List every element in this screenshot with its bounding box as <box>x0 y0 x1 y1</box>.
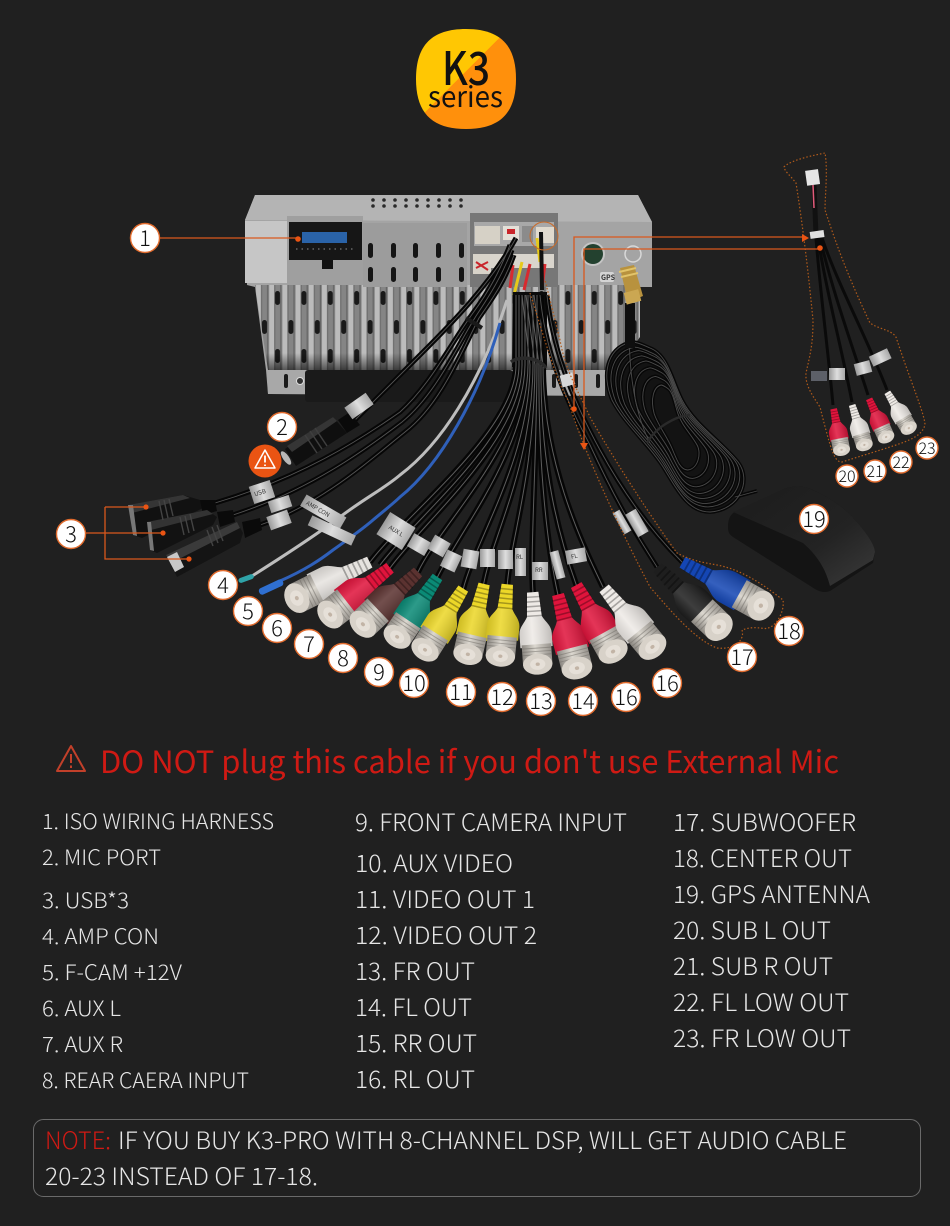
legend column 1: 1. ISO WIRING HARNESS <box>42 806 274 836</box>
legend column 3: 18. CENTER OUT <box>673 839 852 874</box>
number markers: 16 <box>614 680 638 712</box>
number markers: 3 <box>65 517 77 549</box>
number markers: 1 <box>139 221 151 253</box>
RCA connector 10 aux video <box>406 580 477 667</box>
legend column 1: 7. AUX R <box>42 1029 123 1059</box>
number markers: 10 <box>402 666 426 698</box>
head unit rear chassis: GPS <box>601 273 616 283</box>
number markers: 17 <box>730 640 754 672</box>
blue F-CAM wire <box>280 323 500 581</box>
badge: K3 series: series <box>428 74 503 116</box>
RCA connector 18 center out <box>674 547 780 627</box>
RCA connector 11 video out 1 <box>450 580 500 668</box>
legend column 3: 20. SUB L OUT <box>673 911 831 946</box>
legend column 2: 14. FL OUT <box>355 988 472 1023</box>
number markers: 18 <box>777 614 801 646</box>
legend column 3: 23. FR LOW OUT <box>673 1019 851 1054</box>
badge: K3 series <box>416 29 516 129</box>
RCA connector 16 RL out <box>591 577 673 666</box>
RCA connector 13 FR out <box>517 591 555 676</box>
USB connectors <box>128 495 262 577</box>
number markers: 2 <box>276 410 288 442</box>
legend column 1: 2. MIC PORT <box>42 842 161 872</box>
optional audio harness 20-23 <box>805 169 920 458</box>
vent dots <box>371 198 463 208</box>
badge: K3 series: K3 <box>442 33 490 99</box>
number markers: 20 <box>838 463 856 487</box>
SMA gold connector <box>620 265 643 302</box>
dotted outline: connector port <box>530 222 558 250</box>
callout line 1 <box>160 236 301 242</box>
note box: IF YOU BUY K3-PRO WITH 8-CHANNEL DSP, WILL GET AUDIO CABLE <box>118 1121 847 1156</box>
RCA connector 17 subwoofer <box>646 556 739 648</box>
legend column 3: 21. SUB R OUT <box>673 947 833 982</box>
ISO connector <box>289 222 362 260</box>
legend column 3: 17. SUBWOOFER <box>673 803 856 838</box>
legend column 1: 4. AMP CON <box>42 921 159 951</box>
centre slotted panel <box>363 223 467 287</box>
number markers: 4 <box>217 568 229 600</box>
left bracket panel <box>245 221 287 283</box>
number markers: 19 <box>802 502 826 534</box>
RCA connector 8 rear camera <box>343 560 430 644</box>
RCA connector 6 AUX L <box>279 547 377 619</box>
legend column 2: 13. FR OUT <box>355 952 475 987</box>
RCA connector 9 front camera <box>378 568 451 655</box>
number markers: 12 <box>490 680 514 712</box>
aerial port + GPS <box>581 242 605 266</box>
number markers: 23 <box>918 435 936 459</box>
legend column 2: 11. VIDEO OUT 1 <box>355 880 535 915</box>
cable ties <box>511 358 546 368</box>
number markers: 7 <box>303 627 315 659</box>
RCA connector 7 AUX R <box>311 554 401 635</box>
number markers <box>56 221 938 716</box>
legend column 2: 12. VIDEO OUT 2 <box>355 916 537 951</box>
cable tie <box>647 415 690 443</box>
cable label tags: AUX L <box>387 523 406 539</box>
note box: NOTE: <box>45 1121 111 1156</box>
legend column 2: 15. RR OUT <box>355 1024 477 1059</box>
legend column 1: 5. F-CAM +12V <box>42 957 182 987</box>
callout arrows: harness vs cables <box>571 234 823 450</box>
note box <box>34 1120 920 1196</box>
number markers: 9 <box>373 655 385 687</box>
RCA connector 12 video out 2 <box>483 583 523 668</box>
legend column 3: 22. FL LOW OUT <box>673 983 849 1018</box>
cable label tags: RL <box>516 552 524 561</box>
number markers: 14 <box>571 684 595 716</box>
GPS antenna cable coil <box>607 265 757 512</box>
mic connector <box>279 412 360 466</box>
warning icon <box>248 444 282 478</box>
cable label tags: RR <box>535 565 543 574</box>
dotted outline: 20-23 harness <box>784 153 925 462</box>
legend column 3 <box>673 803 870 1054</box>
legend column 1: 8. REAR CAERA INPUT <box>42 1065 249 1095</box>
lower plate <box>267 370 605 395</box>
cable bundle <box>215 238 682 596</box>
legend column 2: 9. FRONT CAMERA INPUT <box>355 803 627 838</box>
dotted outline: 17-18 cables <box>530 280 783 648</box>
number markers: 16 <box>655 666 679 698</box>
cable label tags: FL <box>570 551 579 561</box>
cable label tags <box>249 372 649 580</box>
legend column 2: 10. AUX VIDEO <box>355 844 513 879</box>
legend column 3: 19. GPS ANTENNA <box>673 875 870 910</box>
number markers: 21 <box>866 458 884 482</box>
legend column 1: 3. USB*3 <box>42 885 129 915</box>
warning heading: DO NOT plug this cable if you don't use External Mic <box>100 737 839 782</box>
connector bay <box>470 213 558 287</box>
number markers: 8 <box>337 641 349 673</box>
cooling fins <box>255 285 640 370</box>
number markers: 11 <box>449 675 473 707</box>
note box: 20-23 INSTEAD OF 17-18. <box>45 1157 318 1192</box>
number markers: 22 <box>892 449 910 473</box>
number markers: 6 <box>271 611 283 643</box>
legend column 2: 16. RL OUT <box>355 1060 475 1095</box>
GPS antenna puck <box>728 487 875 592</box>
number markers: 13 <box>529 684 553 716</box>
RCA connector 15 RR out <box>561 577 633 669</box>
number markers: 5 <box>242 594 254 626</box>
cable label tags: AMP CON <box>305 498 332 519</box>
gray AMP wire <box>252 300 507 576</box>
cable label tags: USB <box>253 486 267 498</box>
legend column 2 <box>355 803 627 1095</box>
head unit rear chassis <box>245 195 652 402</box>
callout bracket 3 <box>86 504 192 562</box>
legend column 1 <box>42 806 274 1095</box>
legend column 1: 6. AUX L <box>42 993 121 1023</box>
RCA connector 14 FL out <box>542 590 596 683</box>
